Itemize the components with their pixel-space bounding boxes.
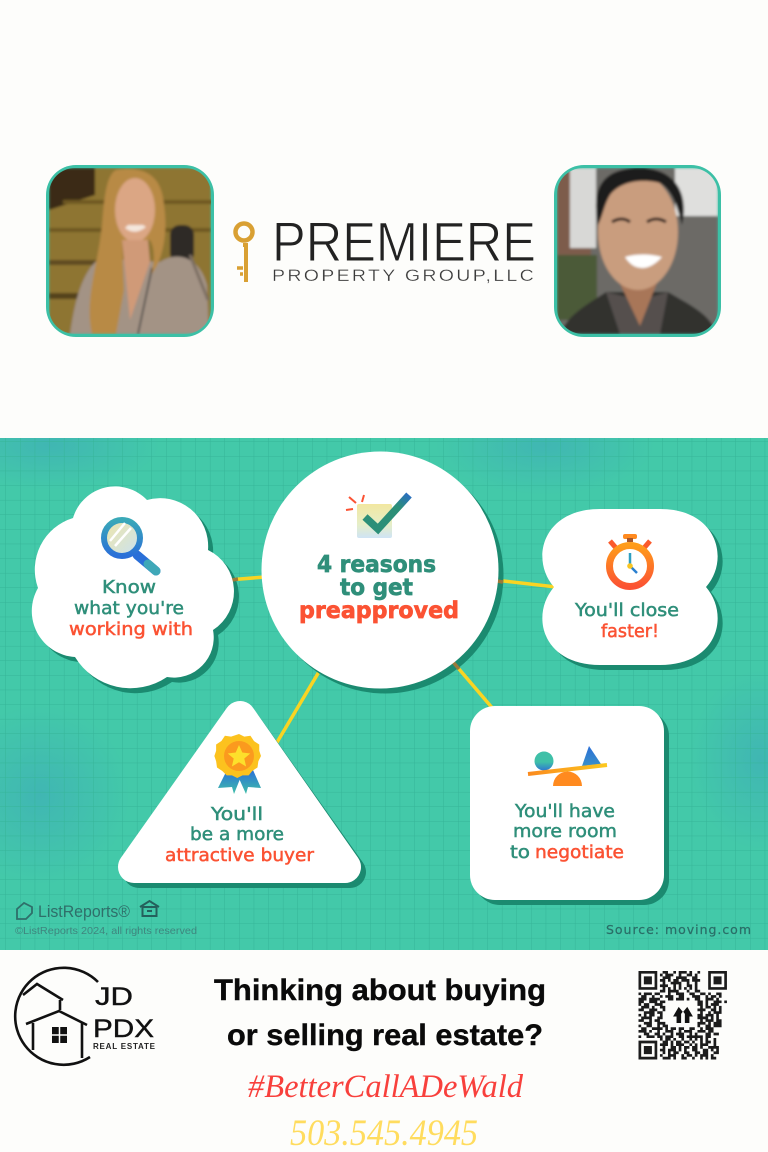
text: you'll have more room to negotiate: You'll have bbox=[514, 801, 615, 822]
icon: qr center arrows bbox=[673, 1007, 693, 1023]
text: you'll be a more attractive buyer: attractive buyer bbox=[165, 845, 315, 866]
text: know what you're working with: Know bbox=[102, 577, 156, 598]
icon: magnifying glass bbox=[104, 520, 156, 571]
headline: thinking about buying or selling real estate: or selling real estate? bbox=[227, 1019, 543, 1052]
text: you'll have more room to negotiate: more room bbox=[513, 821, 617, 842]
icon: gold key bbox=[236, 224, 252, 282]
logo: JD PDX Real Estate bbox=[15, 968, 156, 1065]
icon: stopwatch bbox=[610, 534, 650, 586]
icon: award medal bbox=[214, 734, 261, 794]
panel: cloud, know what you're working with bbox=[32, 486, 239, 693]
icon: listreports mark bbox=[17, 903, 32, 919]
text: you'll be a more attractive buyer bbox=[165, 804, 315, 866]
heading: 4 reasons to get preapproved bbox=[299, 552, 459, 624]
heading: 4 reasons to get preapproved: to get bbox=[340, 575, 413, 601]
photo: woman agent bbox=[46, 165, 214, 337]
photo: man agent bbox=[554, 165, 721, 337]
logo text: PDX: PDX bbox=[93, 1015, 154, 1043]
connector lines bbox=[228, 577, 556, 744]
QR code bbox=[638, 972, 727, 1058]
logo: Premiere Property Group bbox=[236, 210, 536, 282]
icon: equal housing bbox=[140, 901, 159, 916]
panel: square, more room to negotiate bbox=[470, 706, 669, 905]
text: know what you're working with: working with bbox=[69, 619, 193, 640]
text: you'll be a more attractive buyer: be a more bbox=[190, 824, 284, 845]
logo tagline: PROPERTY GROUP,LLC bbox=[272, 266, 536, 285]
text: you'll be a more attractive buyer: You'll bbox=[210, 804, 263, 825]
panel: peanut, you'll close faster bbox=[542, 509, 723, 670]
copyright: ©ListReports 2024, all rights reserved bbox=[15, 925, 197, 937]
icon: seesaw balance bbox=[528, 746, 607, 786]
panel: teal background bbox=[0, 395, 768, 950]
icon: checklist check bbox=[346, 495, 409, 538]
panel: triangle, attractive buyer bbox=[134, 717, 350, 872]
logo wordmark: PREMIERE bbox=[272, 210, 536, 273]
icon: house in circle bbox=[15, 968, 98, 1065]
text: you'll close faster: You'll close bbox=[574, 600, 679, 621]
heading: 4 reasons to get preapproved: preapproved bbox=[299, 598, 459, 624]
listreports logo bbox=[17, 903, 130, 921]
headline: thinking about buying or selling real estate: Thinking about buying bbox=[214, 974, 546, 1007]
headline: thinking about buying or selling real estate bbox=[214, 974, 546, 1052]
text: you'll close faster: faster! bbox=[601, 621, 659, 642]
listreports wordmark: ListReports® bbox=[38, 903, 130, 921]
source: Source: moving.com bbox=[606, 922, 751, 937]
heading: 4 reasons to get preapproved: 4 reasons bbox=[317, 552, 436, 578]
text: know what you're working with: what you're bbox=[74, 598, 184, 619]
text: you'll have more room to negotiate: to bbox=[510, 842, 530, 863]
logo text: real estate: REAL ESTATE bbox=[93, 1042, 156, 1051]
text: you'll have more room to negotiate bbox=[510, 801, 624, 863]
text: you'll close faster bbox=[574, 600, 679, 642]
hashtag: #BetterCallADeWald bbox=[248, 1069, 523, 1105]
logo text: JD: JD bbox=[95, 983, 133, 1011]
panel: center circle bbox=[262, 452, 504, 694]
text: you'll have more room to negotiate: negotiate bbox=[535, 842, 624, 863]
text: know what you're working with bbox=[69, 577, 193, 640]
